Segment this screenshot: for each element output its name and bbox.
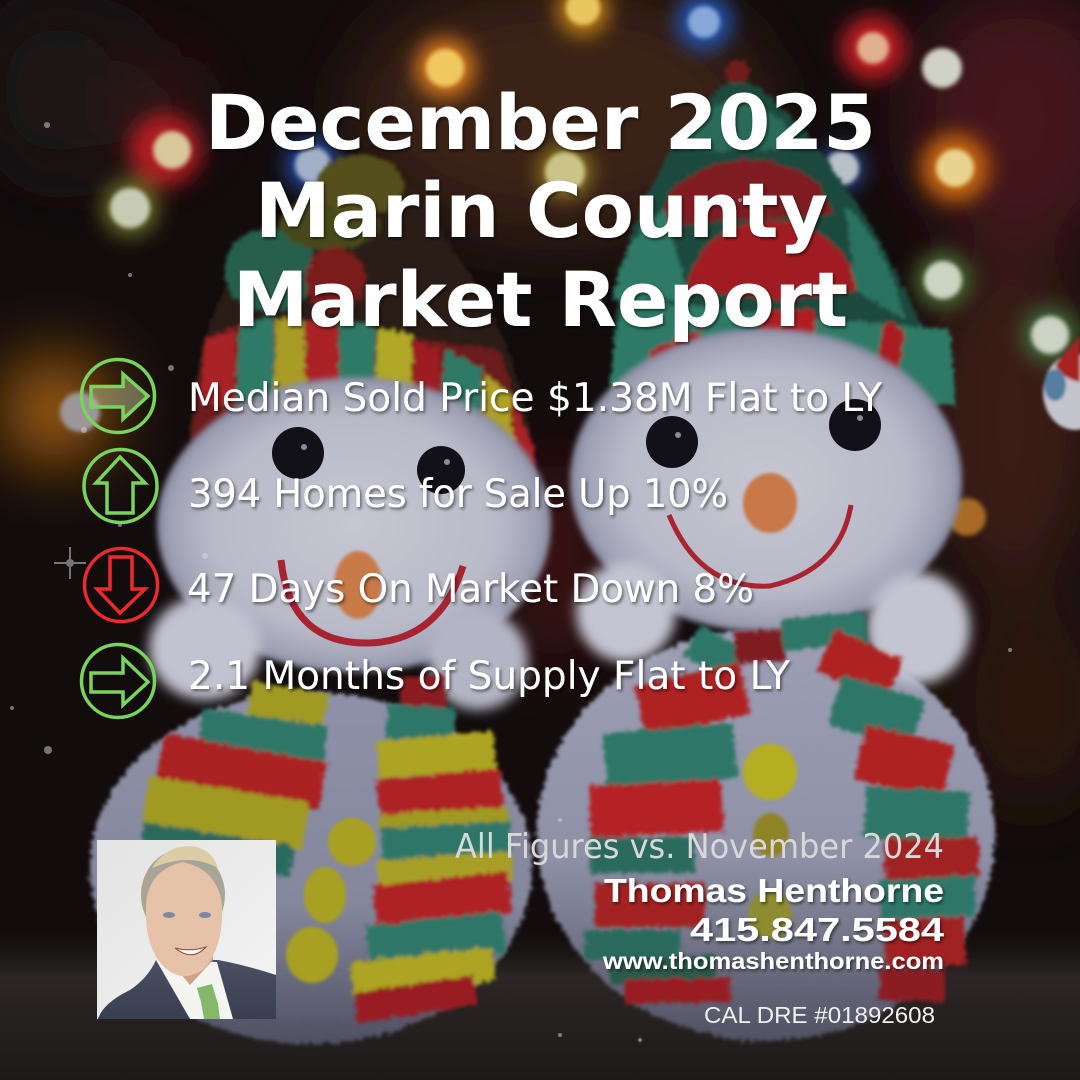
right buttons [743, 744, 797, 939]
bokeh halos [102, 0, 1078, 363]
agent contact details: www.thomashenthorne.com [602, 948, 944, 974]
license number: CAL DRE #01892608 [704, 1002, 935, 1028]
title [205, 78, 876, 344]
agent contact details: 415.847.5584 [690, 911, 945, 948]
side hair [141, 849, 225, 941]
snowman: right [537, 60, 995, 1041]
bokeh discs [60, 0, 1069, 536]
right face [646, 399, 881, 586]
tie [197, 984, 220, 1019]
stat: median sold price: Median Sold Price $1.38M Flat to LY [188, 376, 882, 421]
right scarf [585, 628, 978, 992]
right hand puffs [576, 562, 970, 684]
snow specks [10, 122, 1012, 1042]
left scarf [142, 690, 512, 1008]
icon: flat arrow, median price [82, 360, 154, 432]
icon: flat arrow, months of supply [82, 644, 154, 718]
agent contact details [602, 872, 945, 974]
left snowman hat [190, 155, 535, 480]
comparison note: All Figures vs. November 2024 [455, 827, 944, 867]
suit [98, 960, 276, 1019]
right snowman hat [610, 60, 956, 405]
left face [272, 427, 465, 643]
stat: months of supply: 2.1 Months of Supply Flat to LY [188, 654, 790, 699]
left snowman body [90, 692, 532, 1044]
stat: days on market: 47 Days On Market Down 8% [187, 567, 754, 612]
glow areas [0, 0, 1080, 810]
left buttons [286, 818, 376, 983]
eyes and smile [163, 912, 175, 918]
title: Marin County [255, 166, 828, 255]
left snowman head [157, 377, 551, 673]
agent contact details: Thomas Henthorne [604, 872, 944, 909]
title: December 2025 [205, 78, 876, 167]
right snowman head [570, 328, 962, 632]
right snowman body [537, 629, 995, 1041]
icon: up arrow, homes for sale [84, 450, 157, 522]
agent photo [97, 840, 276, 1019]
neck [165, 940, 213, 985]
shirt [156, 960, 233, 1019]
icon: down arrow, days on market [84, 548, 158, 622]
left hand puffs [149, 596, 528, 710]
face [146, 862, 222, 976]
blond hair [152, 846, 218, 868]
title: Market Report [233, 255, 848, 344]
snowman: left [90, 155, 551, 1044]
floor [0, 930, 1080, 1080]
right edge ornament [1043, 336, 1080, 430]
stat: homes for sale: 394 Homes for Sale Up 10% [188, 472, 728, 517]
